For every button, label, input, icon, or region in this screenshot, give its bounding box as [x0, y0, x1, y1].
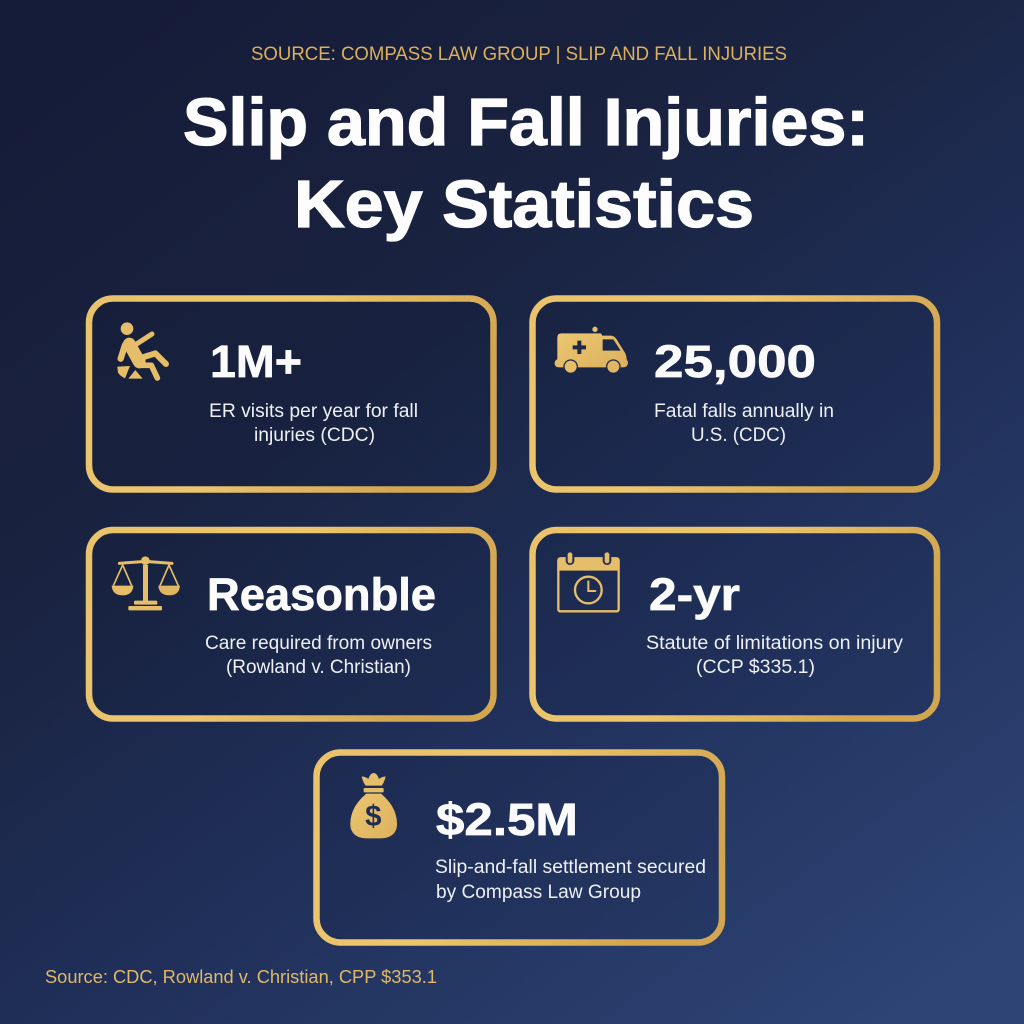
description: (CCP $335.1) [696, 657, 815, 678]
card frame [532, 298, 937, 490]
icon: money bag: $ [365, 800, 381, 833]
title [183, 85, 869, 242]
panel: ER visits [89, 298, 494, 490]
card frame [89, 530, 494, 718]
description [654, 401, 834, 446]
description: by Compass Law Group [436, 882, 641, 903]
panel: reasonable care [89, 530, 494, 718]
title: Slip and Fall Injuries: [183, 85, 869, 160]
stat: $2.5M: $2.5M [436, 794, 578, 845]
icon: scales of justice [112, 556, 180, 610]
panel: statute of limitations [532, 530, 937, 718]
source line: SOURCE: COMPASS LAW GROUP | SLIP AND FALL INJURIES [251, 43, 787, 65]
icon: person falling [117, 322, 166, 379]
icon: ambulance [555, 327, 628, 374]
description [205, 633, 432, 678]
description [209, 401, 418, 446]
panel: settlement [316, 752, 722, 942]
description: U.S. (CDC) [691, 425, 786, 446]
description: Statute of limitations on injury [646, 633, 904, 654]
icon: money bag [350, 773, 397, 838]
card frame [316, 752, 722, 942]
description [435, 857, 706, 903]
stat: 25,000: 25,000 [654, 336, 816, 387]
panel: fatal falls [532, 298, 937, 490]
stat: 2-yr: 2-yr [649, 569, 740, 620]
icon: calendar with clock [557, 551, 619, 611]
title: Key Statistics [294, 167, 754, 242]
stat: 1M+: 1M+ [210, 336, 302, 387]
description [646, 633, 904, 678]
footer source: Source: CDC, Rowland v. Christian, CPP $353.1 [45, 967, 437, 987]
description: injuries (CDC) [254, 425, 375, 446]
description: Care required from owners [205, 633, 432, 654]
description: Fatal falls annually in [654, 401, 834, 422]
stat: Reasonble: Reasonble [207, 569, 436, 620]
description: ER visits per year for fall [209, 401, 418, 422]
description: (Rowland v. Christian) [226, 657, 411, 678]
description: Slip-and-fall settlement secured [435, 857, 706, 878]
card frame [89, 298, 494, 490]
card frame [532, 530, 937, 718]
